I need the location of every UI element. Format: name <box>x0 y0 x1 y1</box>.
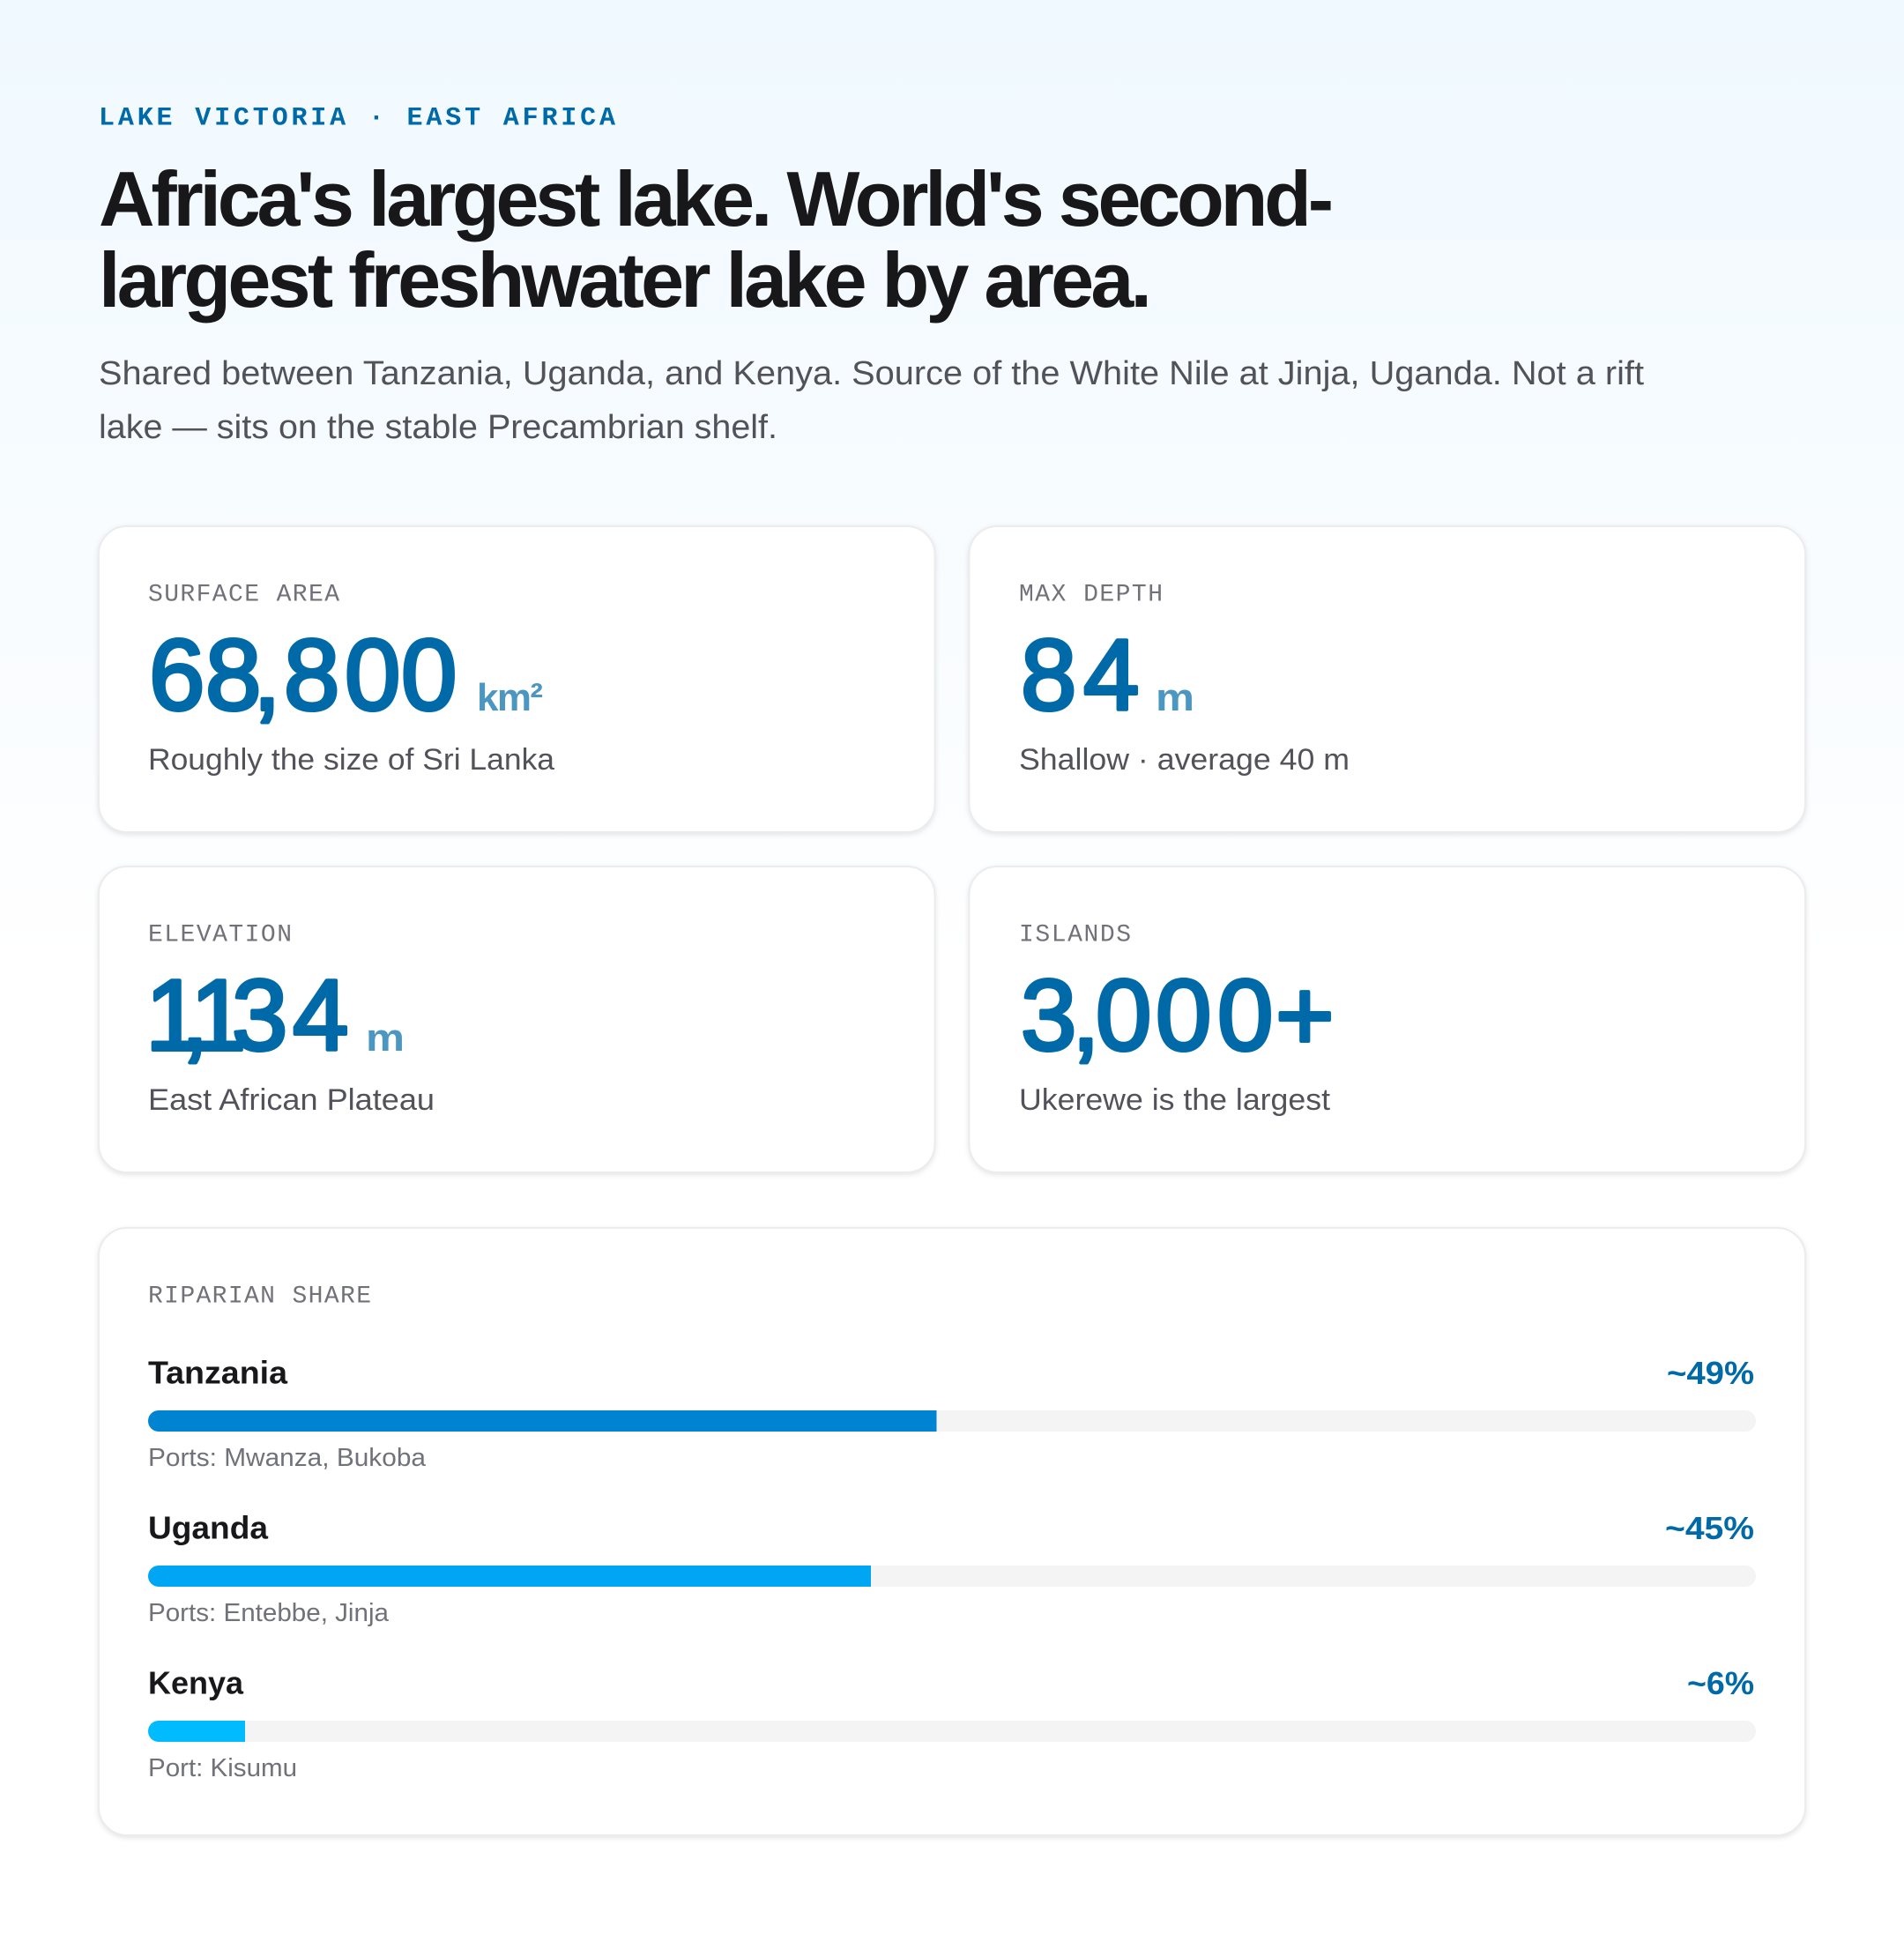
row: Tanzania: Tanzania <box>148 1354 288 1391</box>
panel: surface area: km² <box>477 676 543 719</box>
panel: surface area: 68,800 <box>149 620 457 732</box>
panel: max depth: 84 <box>1021 620 1139 732</box>
panel: elevation: East African Plateau <box>148 1083 435 1117</box>
title <box>99 155 1334 324</box>
panel: elevation: m <box>366 1016 405 1060</box>
title: largest freshwater lake by area. <box>99 236 1152 324</box>
row: Uganda <box>148 1509 1756 1627</box>
panel: elevation: ELEVATION <box>148 922 292 948</box>
panel: surface area <box>99 526 934 832</box>
row: Tanzania <box>148 1354 1756 1472</box>
row: Uganda: Ports: Entebbe, Jinja <box>148 1599 390 1627</box>
row: Tanzania: Ports: Mwanza, Bukoba <box>148 1444 427 1472</box>
panel: islands: ISLANDS <box>1019 922 1131 948</box>
row: Kenya: Kenya <box>148 1664 244 1701</box>
panel: max depth <box>970 526 1805 832</box>
subtitle: lake — sits on the stable Precambrian shelf. <box>99 409 777 446</box>
row: Kenya: ~6% <box>1687 1665 1754 1701</box>
subtitle: Shared between Tanzania, Uganda, and Kenya. Source of the White Nile at Jinja, Uganda. Not a rift <box>99 355 1644 392</box>
title: Africa's largest lake. World's second- <box>99 155 1334 242</box>
row: Kenya: Port: Kisumu <box>148 1754 297 1782</box>
row: Kenya <box>148 1664 1756 1782</box>
eyebrow: LAKE VICTORIA · EAST AFRICA <box>99 104 615 134</box>
panel heading: RIPARIAN SHARE <box>148 1283 371 1310</box>
panel: max depth: MAX DEPTH <box>1019 582 1163 608</box>
panel: riparian share <box>99 1228 1805 1835</box>
panel: surface area: Roughly the size of Sri Lanka <box>148 743 554 777</box>
panel: surface area: SURFACE AREA <box>148 582 339 608</box>
panel: islands: 3,000+ <box>1021 960 1335 1072</box>
panel: max depth: Shallow · average 40 m <box>1019 743 1350 777</box>
panel: islands <box>970 867 1805 1172</box>
subtitle <box>99 355 1644 446</box>
panel: elevation: 1,134 <box>145 960 348 1072</box>
panel: elevation <box>99 867 934 1172</box>
row: Tanzania: ~49% <box>1667 1355 1754 1391</box>
row: Uganda: ~45% <box>1665 1510 1754 1546</box>
panel: max depth: m <box>1156 676 1194 719</box>
row: Uganda: Uganda <box>148 1509 269 1546</box>
panel: islands: Ukerewe is the largest <box>1019 1083 1331 1117</box>
